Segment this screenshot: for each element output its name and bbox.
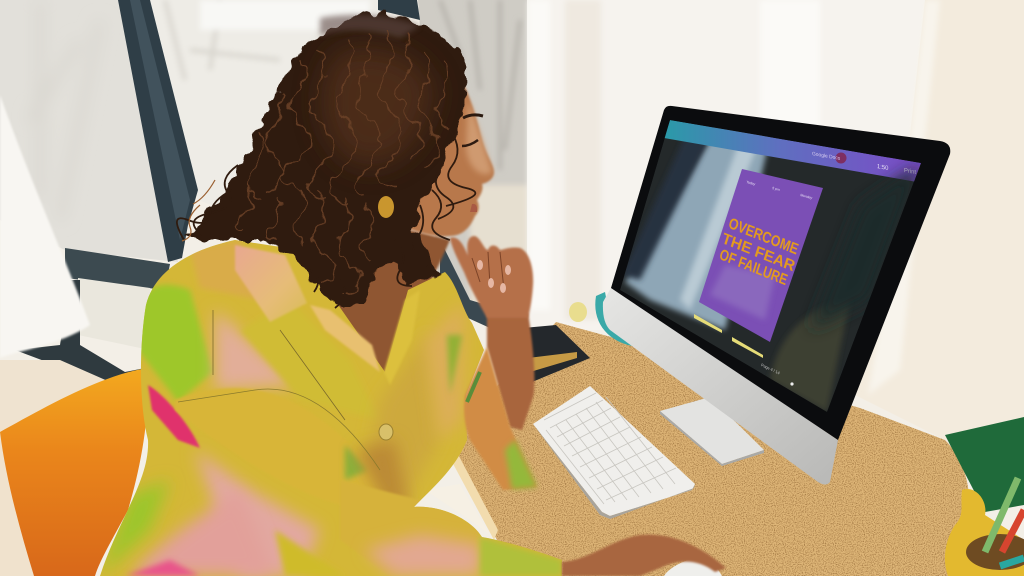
top bar [664,120,921,182]
reflection dark area [770,309,848,411]
cuff [464,347,537,490]
neck and chest [335,225,450,375]
shirt colour patches [138,285,213,402]
yellow clip [569,302,587,322]
chair [0,368,148,576]
poster headline: OF FAILURE [717,246,789,289]
button [379,424,393,440]
poster [699,169,823,342]
screen: 5 pm [772,186,780,192]
forearm [487,310,534,430]
curtain left [0,95,90,358]
poster small labels: Today [746,180,756,186]
screen: Monday [800,193,813,200]
monitor [603,106,950,484]
desk [425,322,969,576]
monitor bezel [611,106,950,440]
notebook [523,325,590,382]
curtain reflection [625,128,770,330]
window frame right lower [440,240,490,328]
pen holder [945,478,1024,576]
screen: 1:50 [877,164,889,172]
window frame top middle [378,0,420,20]
collar left [235,245,307,322]
hair [177,13,475,308]
arm crease [178,389,380,470]
poster headline: THE FEAR [720,230,797,275]
face [395,70,494,236]
curls: stray strands [177,130,475,308]
monitor stand [660,397,764,464]
lower hand on mouse [562,535,726,576]
clipboard [945,417,1024,512]
teal object [595,292,632,346]
yellow timeline marks [694,314,722,333]
top bar labels: Google Docs [812,151,841,162]
woman [90,13,726,576]
page label: Page 4 / 14 [761,362,781,376]
collar right [310,305,380,372]
pens [985,478,1024,566]
window pane right with trees [418,0,530,300]
raised hand [450,236,533,318]
screen: Print [904,168,916,176]
poster headline [720,218,799,286]
screen [620,120,921,412]
desk edge [443,443,498,540]
mouse [664,558,722,576]
window frame diagonal [118,0,198,262]
curls: light strands [235,30,447,295]
monitor chin [603,286,838,484]
poster headline: OVERCOME [726,215,800,258]
window pane middle [150,0,470,300]
floor [0,360,110,440]
lips [470,204,477,212]
shirt [90,230,580,576]
keyboard [533,386,695,519]
window pane left [0,0,178,262]
window frame horizontal [65,248,170,290]
eyebrow and eye [463,115,483,118]
curtain right [527,0,927,330]
keyboard key rows [544,393,676,504]
earring [378,196,394,218]
wall right [855,0,1024,440]
